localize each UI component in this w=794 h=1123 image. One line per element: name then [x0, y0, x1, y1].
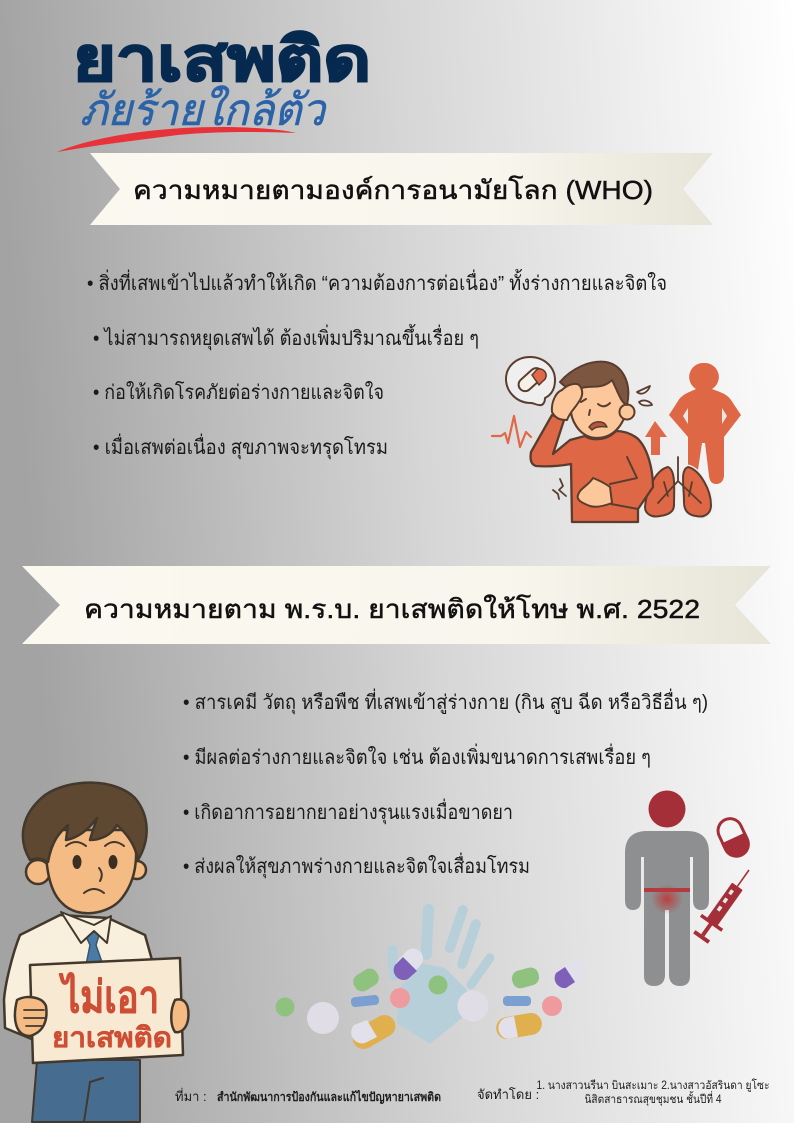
text block: WHO bullet points: • เมื่อเสพต่อเนื่อง สุขภาพจะทรุดโทรม	[93, 433, 388, 460]
sign text: ไม่เอา	[59, 971, 159, 1022]
trousers	[32, 1060, 140, 1122]
footer: organizers: จัดทำโดย :	[477, 1087, 539, 1102]
text block: WHO bullet points: • สิ่งที่เสพเข้าไปแล้วทำให้เกิด “ความต้องการต่อเนื่อง” ทั้งร่างกายและจิตใจ	[87, 269, 667, 295]
icon: lungs	[645, 457, 711, 517]
icon: pain marks	[553, 479, 566, 499]
illustration: boy holding sign	[4, 783, 188, 1122]
footer: source	[175, 1088, 441, 1104]
footer: organizers: 1. นางสาวนรีนา บินสะเมาะ 2.นางสาวอัสรินดา ยูโซะ	[536, 1078, 770, 1092]
hair	[23, 783, 147, 862]
icon: capsule	[713, 814, 754, 862]
banner: WHO definition: ความหมายตามองค์การอนามัยโลก (WHO)	[133, 175, 653, 205]
text block: Narcotics Act bullet points: • มีผลต่อร่างกายและจิตใจ เช่น ต้องเพิ่มขนาดการเสพเรื่อย ๆ	[183, 743, 651, 769]
title: ยาเสพติด ภัยร้ายใกล้ตัว: ยาเสพติด	[73, 26, 371, 93]
shirt	[4, 915, 152, 1040]
icon: syringe	[690, 862, 760, 946]
icon: pills	[276, 998, 294, 1016]
icon: sweat drops	[637, 386, 652, 406]
footer: source: ที่มา :	[175, 1088, 207, 1104]
text block: Narcotics Act bullet points	[183, 688, 708, 879]
text block: WHO bullet points: • ก่อให้เกิดโรคภัยต่อร่างกายและจิตใจ	[93, 381, 384, 404]
banner: Narcotics Act definition	[22, 566, 771, 644]
facial features	[72, 855, 82, 869]
icon: heartbeat line	[492, 416, 531, 447]
icon: pill speech bubble	[506, 357, 555, 405]
icon: handprint	[387, 904, 496, 1044]
ears	[26, 860, 50, 884]
text block: WHO bullet points: • ไม่สามารถหยุดเสพได้ ต้องเพิ่มปริมาณขึ้นเรื่อย ๆ	[93, 324, 479, 351]
banner: WHO definition	[90, 153, 713, 225]
sign	[30, 958, 183, 1063]
footer: organizers: นิสิตสาธารณสุขชุมชน ชั้นปีที่ 4	[584, 1091, 722, 1106]
face	[46, 830, 136, 913]
capsules	[349, 1011, 399, 1053]
icon: hand on belly	[578, 478, 612, 507]
collar	[61, 912, 111, 943]
icon: man body	[531, 415, 653, 522]
text block: Narcotics Act bullet points: • ส่งผลให้สุขภาพร่างกายและจิตใจเสื่อมโทรม	[183, 852, 530, 879]
illustration: handprint and pills	[276, 904, 590, 1053]
necktie	[84, 932, 103, 965]
illustration: boy holding sign: ยาเสพติด	[52, 1022, 172, 1053]
icon: standing body	[669, 363, 741, 484]
icon: up arrow	[645, 421, 667, 455]
title: ยาเสพติด ภัยร้ายใกล้ตัว: ภัยร้ายใกล้ตัว	[80, 85, 327, 135]
text block: Narcotics Act bullet points: • เกิดอาการอยากยาอย่างรุนแรงเมื่อขาดยา	[183, 798, 513, 825]
text block: WHO bullet points	[87, 269, 667, 460]
title: ยาเสพติด ภัยร้ายใกล้ตัว	[57, 26, 371, 152]
icon: hand on forehead	[552, 384, 582, 420]
text block: Narcotics Act bullet points: • สารเคมี วัตถุ หรือพืช ที่เสพเข้าสู่ร่างกาย (กิน สูบ ฉีด หรือวิธีอื่น ๆ)	[183, 688, 708, 715]
icon: man head	[571, 377, 627, 438]
icon: sick man with lungs and body	[492, 357, 741, 522]
footer: source: สำนักพัฒนาการป้องกันและแก้ไขปัญหายาเสพติด	[217, 1089, 441, 1104]
banner: Narcotics Act definition: ความหมายตาม พ.ร.บ. ยาเสพติดให้โทษ พ.ศ. 2522	[84, 594, 700, 624]
hands	[15, 997, 46, 1036]
footer: organizers	[477, 1078, 770, 1106]
icon: body with pill and syringe	[625, 790, 760, 986]
